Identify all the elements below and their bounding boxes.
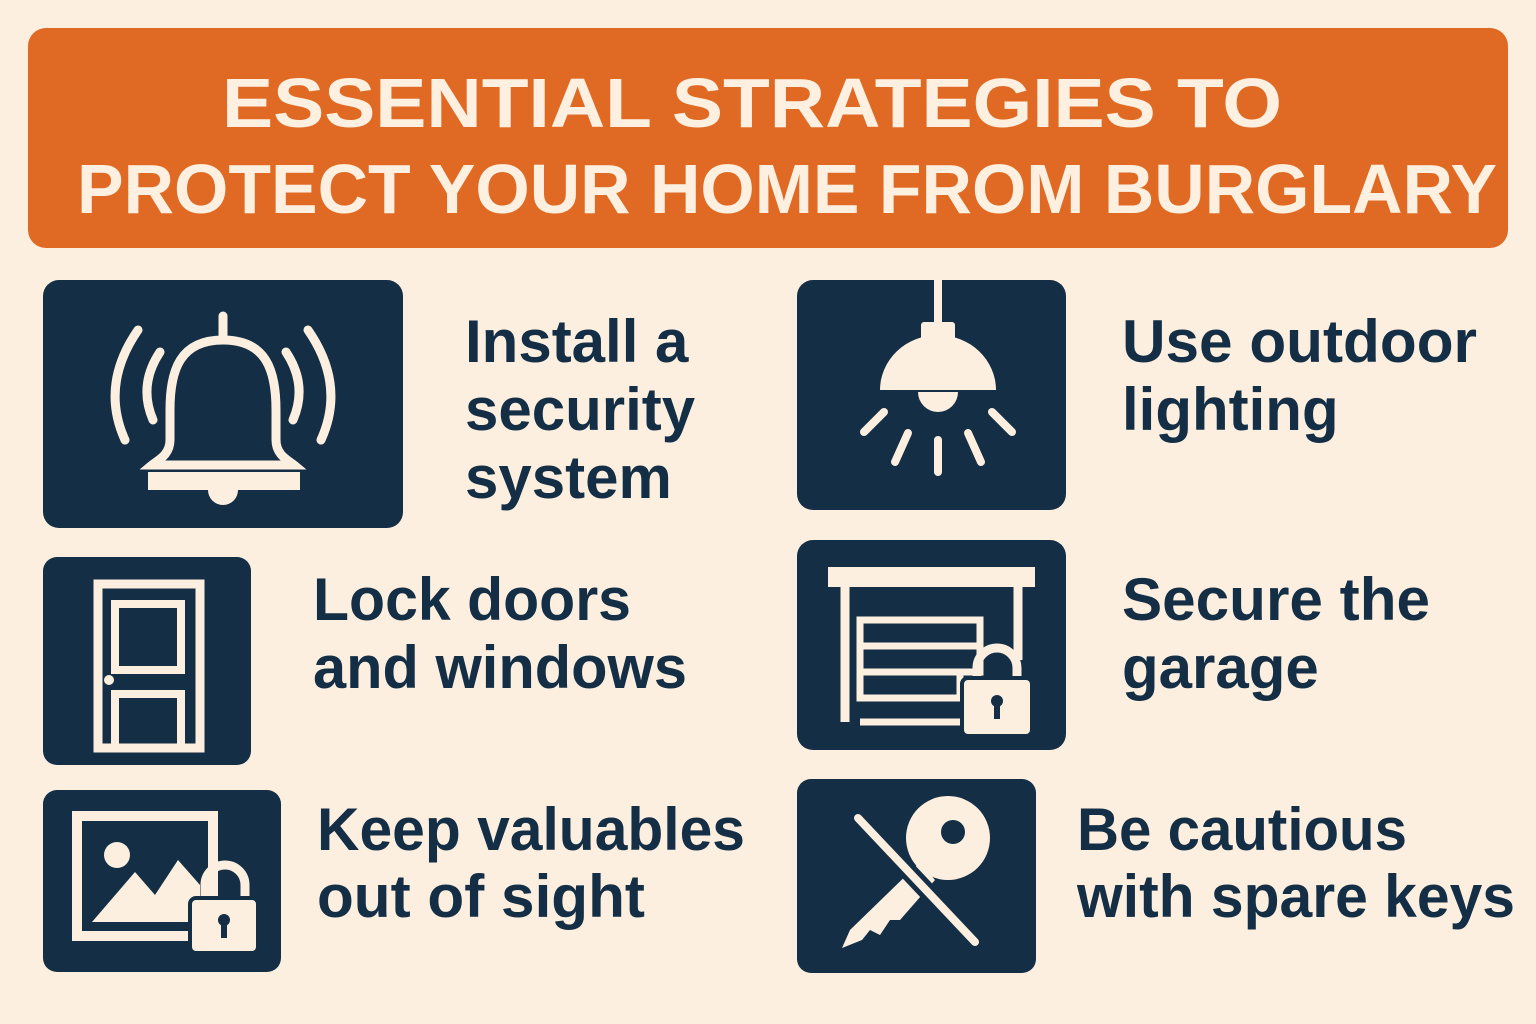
title banner (28, 28, 1508, 248)
text: outdoor lighting (1122, 308, 1477, 443)
panel: garage icon (797, 540, 1066, 750)
text: lock doors: and windows (313, 634, 687, 701)
text: install security system: Install a (465, 308, 689, 375)
panel: spare keys icon (797, 779, 1036, 973)
panel: valuables icon (43, 790, 281, 972)
title banner: PROTECT YOUR HOME FROM BURGLARY (77, 150, 1497, 228)
text: secure garage (1122, 566, 1430, 701)
text: lock doors (313, 566, 687, 701)
text: valuables: Keep valuables (317, 796, 745, 863)
text: spare keys: with spare keys (1076, 863, 1515, 930)
text: install security system: security (465, 376, 696, 443)
text: lock doors: Lock doors (313, 566, 631, 633)
text: install security system (465, 308, 696, 511)
text: secure garage: Secure the (1122, 566, 1430, 633)
panel: security system icon (43, 280, 403, 528)
panel: lighting icon (797, 280, 1066, 510)
text: valuables (317, 796, 745, 930)
text: outdoor lighting: lighting (1122, 376, 1339, 443)
text: valuables: out of sight (317, 863, 645, 930)
panel: door icon (43, 557, 251, 765)
text: spare keys: Be cautious (1077, 796, 1407, 863)
text: secure garage: garage (1122, 634, 1319, 701)
text: spare keys (1076, 796, 1515, 930)
title banner: ESSENTIAL STRATEGIES TO (222, 64, 1282, 142)
text: outdoor lighting: Use outdoor (1122, 308, 1477, 375)
text: install security system: system (465, 444, 672, 511)
